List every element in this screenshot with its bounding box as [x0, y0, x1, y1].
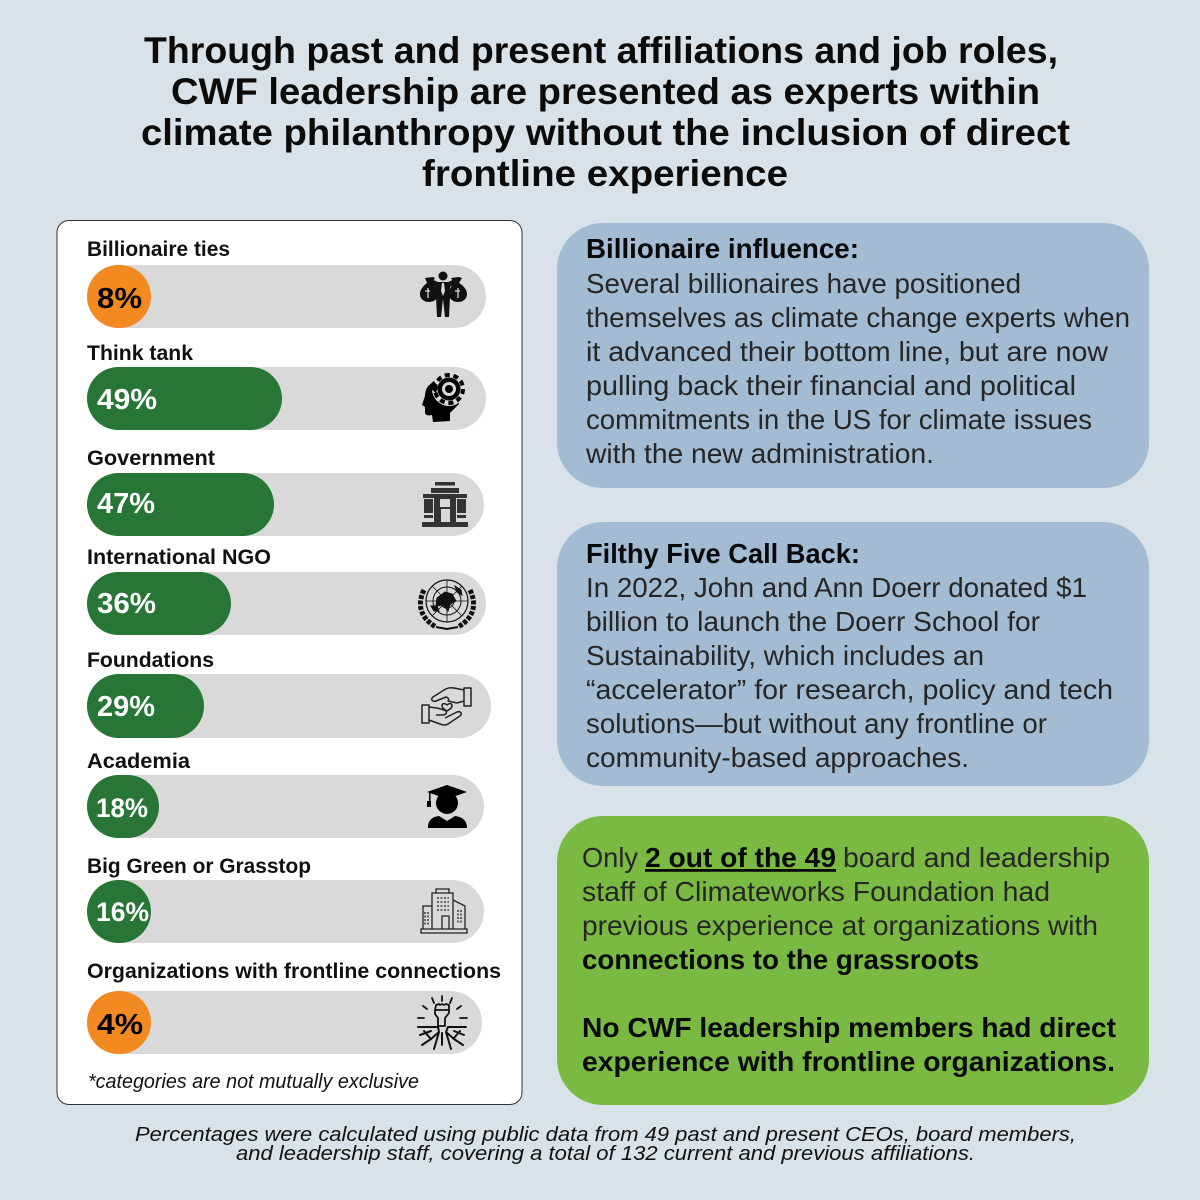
icon: office buildings — [421, 889, 467, 933]
bar: organizations with frontline connections — [87, 960, 501, 1054]
text: no frontline experience finding: No CWF leadership members had direct — [582, 1012, 1116, 1043]
bar: big green or grasstop: 16% — [96, 897, 149, 927]
text: 2 out of the 49 finding: previous experience at organizations with — [582, 910, 1098, 941]
bar: billionaire ties — [87, 238, 486, 328]
bar: academia — [87, 750, 484, 838]
body text: billionaire influence: pulling back their financial and political — [586, 370, 1076, 401]
bar: organizations with frontline connections: 4% — [97, 1009, 143, 1041]
icon: head with gear — [422, 372, 466, 422]
bar: think tank: Think tank — [87, 342, 193, 365]
body text: billionaire influence — [585, 268, 1130, 469]
panel: filthy five call back — [557, 522, 1149, 786]
body text: filthy five call back: solutions—but without any frontline or — [586, 708, 1047, 739]
body text: billionaire influence: it advanced their bottom line, but are now — [586, 336, 1109, 367]
icon: government building — [422, 482, 468, 527]
text: 2 out of the 49 finding: 2 out of the 49 — [645, 842, 836, 873]
body text: billionaire influence: commitments in the US for climate issues — [586, 404, 1092, 435]
title — [141, 30, 1070, 194]
bar: think tank: 49% — [97, 384, 157, 416]
text: 2 out of the 49 finding — [582, 842, 1110, 975]
body text: billionaire influence: with the new administration. — [585, 438, 934, 469]
text: 2 out of the 49 finding: staff of Climateworks Foundation had — [582, 876, 1050, 907]
text: no frontline experience finding — [582, 1012, 1116, 1077]
text: 2 out of the 49 finding: Only — [582, 842, 638, 873]
body text: filthy five call back: billion to launch the Doerr School for — [586, 606, 1040, 637]
body text: billionaire influence: themselves as climate change experts when — [586, 302, 1130, 333]
text: no frontline experience finding: experience with frontline organizations. — [582, 1046, 1115, 1077]
bar: international NGO: 36% — [97, 588, 156, 620]
body text: filthy five call back: In 2022, John and Ann Doerr donated $1 — [586, 572, 1087, 603]
panel: key finding — [557, 816, 1149, 1105]
body text: filthy five call back — [586, 572, 1113, 773]
bar: billionaire ties: Billionaire ties — [87, 238, 230, 261]
bar: foundations: 29% — [97, 691, 155, 723]
bar: billionaire ties: 8% — [97, 283, 142, 315]
bar: government — [87, 447, 484, 536]
icon: fist and roots — [418, 996, 467, 1049]
title: climate philanthropy without the inclusion of direct — [141, 112, 1070, 153]
heading: billionaire influence: Billionaire influence: — [586, 233, 859, 264]
icon: graduate — [427, 785, 467, 828]
bar: government: Government — [87, 447, 215, 470]
icon: UN emblem — [420, 580, 474, 629]
bar: government: 47% — [97, 488, 155, 520]
bar: big green or grasstop — [87, 855, 484, 943]
panel: affiliation bar chart — [57, 220, 522, 1104]
bar: academia: 18% — [96, 793, 148, 823]
bar: foundations: Foundations — [87, 649, 214, 672]
footer note: Percentages were calculated using public data from 49 past and present CEOs, board members, — [135, 1124, 1076, 1146]
body text: filthy five call back: “accelerator” for research, policy and tech — [586, 674, 1113, 705]
bar: international NGO — [87, 546, 486, 635]
title: CWF leadership are presented as experts within — [171, 71, 1040, 112]
body text: filthy five call back: community-based approaches. — [586, 742, 969, 773]
footer note — [135, 1124, 1076, 1165]
title: frontline experience — [422, 153, 788, 194]
bar: international NGO: International NGO — [87, 546, 271, 569]
body text: billionaire influence: Several billionaires have positioned — [586, 268, 1021, 299]
bar: big green or grasstop: Big Green or Grasstop — [87, 855, 311, 878]
bar: foundations — [87, 649, 491, 738]
heading: filthy five call back: Filthy Five Call Back: — [586, 538, 860, 569]
bar: academia: Academia — [87, 750, 190, 773]
bar: think tank — [87, 342, 486, 430]
title: Through past and present affiliations and job roles, — [144, 30, 1058, 71]
panel: billionaire influence — [557, 223, 1149, 488]
footnote: *categories are not mutually exclusive — [88, 1071, 419, 1093]
text: 2 out of the 49 finding: connections to the grassroots — [582, 944, 979, 975]
body text: filthy five call back: Sustainability, which includes an — [586, 640, 984, 671]
icon: man holding money bags — [420, 272, 467, 317]
icon: hands and heart — [422, 688, 471, 725]
footer note: and leadership staff, covering a total of 132 current and previous affiliations. — [236, 1143, 975, 1165]
bar: organizations with frontline connections: Organizations with frontline connections — [87, 960, 501, 983]
text: 2 out of the 49 finding: board and leadership — [843, 842, 1110, 873]
